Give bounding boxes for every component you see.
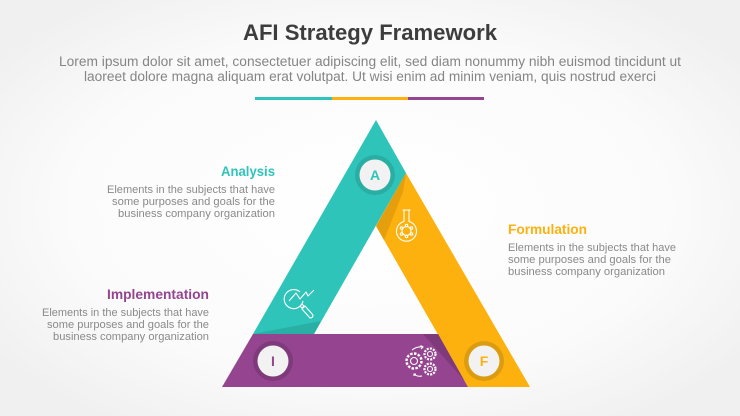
description: implementation: Elements in the subjects that have xyxy=(42,307,209,319)
icon: flask xyxy=(396,210,416,241)
description: analysis xyxy=(107,184,275,220)
description: formulation: business company organization xyxy=(508,266,665,278)
text block: implementation xyxy=(42,286,209,343)
badge: F xyxy=(464,341,504,381)
triangle diagram xyxy=(222,120,530,387)
badge: I xyxy=(253,341,293,381)
description: formulation xyxy=(508,242,676,278)
text block: formulation xyxy=(508,221,676,278)
description: implementation: some purposes and goals for the xyxy=(47,319,209,331)
icon: magnifier with chart xyxy=(284,290,314,318)
icon: gears xyxy=(406,346,436,376)
segment: implementation (purple) xyxy=(222,334,468,387)
heading: implementation: Implementation xyxy=(107,286,209,302)
description: analysis: business company organization xyxy=(118,208,275,220)
text block: analysis xyxy=(107,163,275,220)
description: implementation xyxy=(42,307,209,343)
tricolor divider xyxy=(255,97,484,100)
title: AFI Strategy Framework xyxy=(243,20,497,45)
segment: formulation (yellow) xyxy=(376,173,530,387)
description: formulation: some purposes and goals for the xyxy=(508,254,671,266)
subtitle text block xyxy=(59,54,681,84)
badge: F: F xyxy=(480,353,489,369)
description: formulation: Elements in the subjects that have xyxy=(508,242,676,254)
heading: formulation: Formulation xyxy=(508,221,587,237)
description: analysis: Elements in the subjects that have xyxy=(107,184,275,196)
badge: I: I xyxy=(271,353,275,369)
heading: analysis: Analysis xyxy=(221,163,275,179)
subtitle text block: Lorem ipsum dolor sit amet, consectetuer adipiscing elit, sed diam nonummy nibh euismod tincidunt ut xyxy=(59,54,681,69)
segment: analysis (teal) xyxy=(253,120,406,334)
subtitle text block: laoreet dolore magna aliquam erat volutpat. Ut wisi enim ad minim veniam, quis nostrud exerci xyxy=(84,69,656,84)
badge: A: A xyxy=(370,167,380,183)
description: analysis: some purposes and goals for the xyxy=(112,196,275,208)
badge: A xyxy=(355,155,395,195)
description: implementation: business company organization xyxy=(53,331,209,343)
